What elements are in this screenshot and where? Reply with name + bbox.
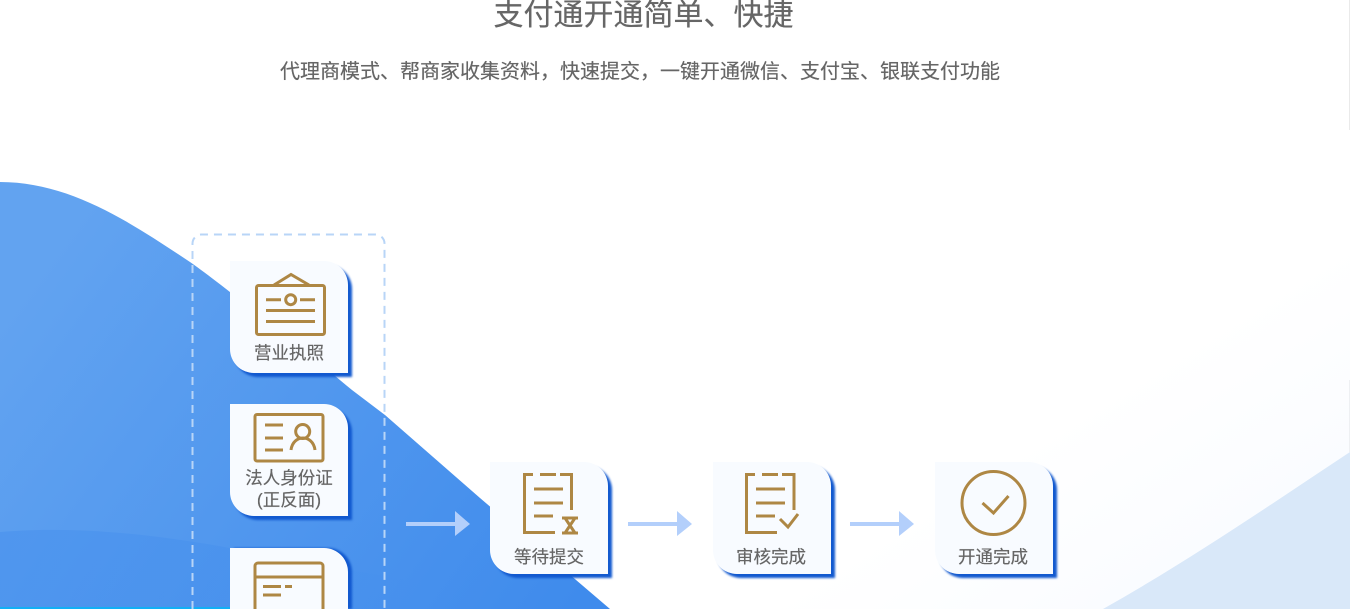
subtitle: 代理商模式、帮商家收集资料，快速提交，一键开通微信、支付宝、银联支付功能 (280, 61, 1000, 83)
icon: document with hourglass (523, 473, 578, 534)
dashed materials group frame (192, 234, 386, 609)
label: legal person ID (245, 468, 333, 510)
icon: circled check (960, 470, 1026, 536)
card: legal person ID (230, 404, 348, 516)
label: waiting for submission: 等待提交 (514, 547, 584, 567)
card: review complete (712, 462, 830, 574)
label: review complete: 审核完成 (736, 547, 806, 567)
label: legal person ID: (正反面) (257, 490, 321, 510)
card: business license (230, 261, 348, 373)
card: activation complete (934, 462, 1052, 574)
arrow: materials to waiting (406, 511, 470, 536)
arrow: review to activated (850, 511, 914, 536)
icon: bank card (254, 562, 324, 609)
icon: business license (255, 272, 326, 336)
label: business license: 营业执照 (254, 343, 324, 363)
card: waiting for submission (490, 462, 608, 574)
arrow: waiting to review (628, 511, 692, 536)
icon: document with check (745, 473, 800, 534)
label: legal person ID: 法人身份证 (245, 468, 333, 488)
icon: ID card (254, 413, 324, 462)
label: activation complete: 开通完成 (958, 547, 1028, 567)
card: bank card (230, 548, 348, 609)
